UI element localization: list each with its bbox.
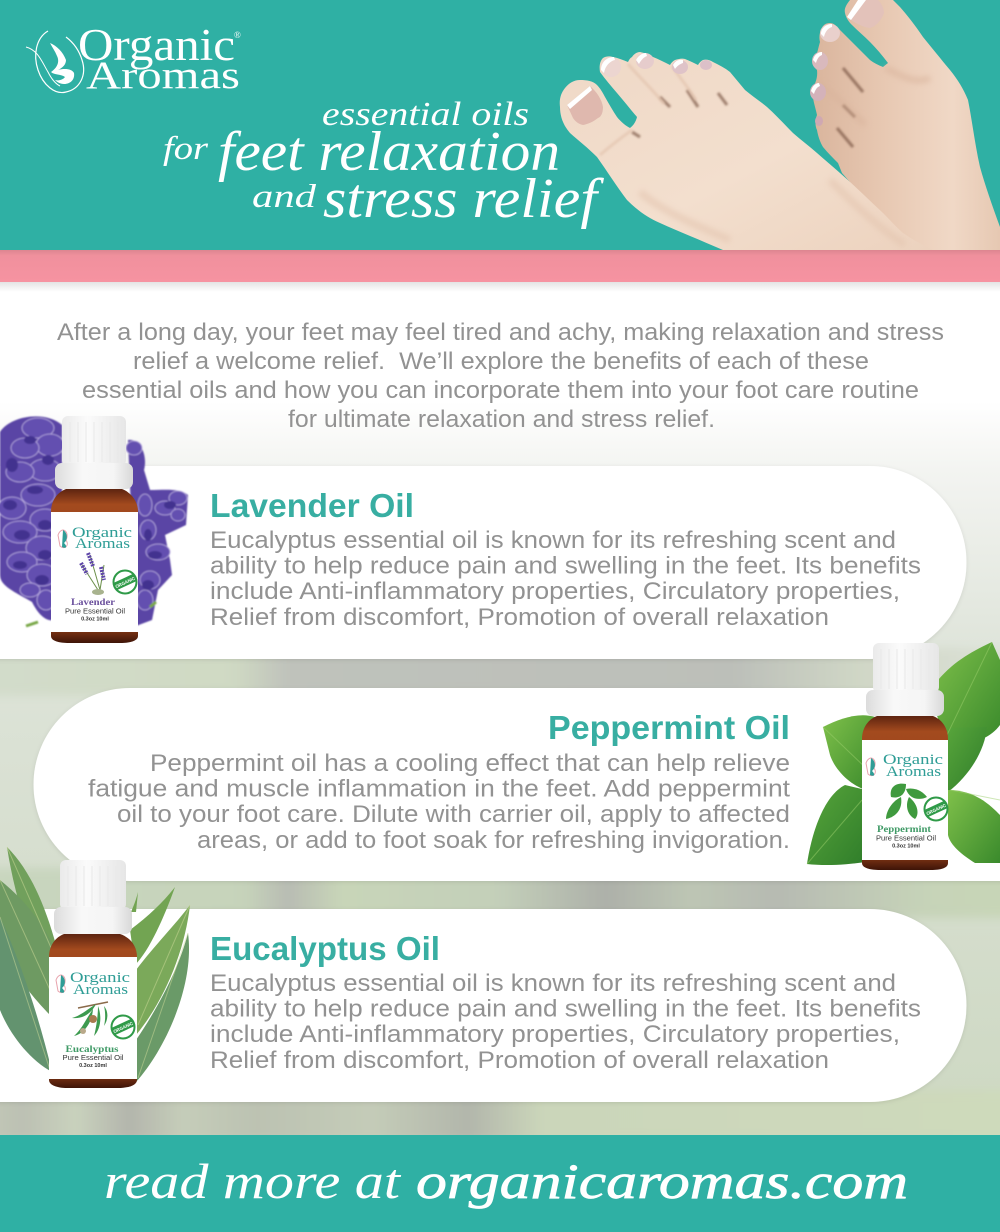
label subtitle: Pure Essential Oil xyxy=(876,836,936,842)
amber glass xyxy=(862,716,948,870)
organic seal xyxy=(111,1016,135,1038)
label logo: Organic xyxy=(72,525,132,541)
front foot xyxy=(560,52,933,250)
toenails xyxy=(567,0,884,126)
heading: Lavender Oil xyxy=(210,487,414,524)
description: include Anti-inflammatory properties, Circulatory properties, xyxy=(210,578,900,605)
intro paragraph: for ultimate relaxation and stress relief. xyxy=(288,406,715,433)
product: eucalyptus bottle xyxy=(49,860,137,1088)
logo wordmark line 1: Organic xyxy=(78,20,235,70)
description: Relief from discomfort, Promotion of overall relaxation xyxy=(210,1047,829,1074)
label herb: mint xyxy=(886,784,927,819)
rear foot xyxy=(811,0,1000,250)
amber glass xyxy=(49,934,137,1088)
label size: 0.3oz 10ml xyxy=(892,844,920,850)
description xyxy=(210,527,921,631)
white label xyxy=(49,957,137,1079)
heading: Eucalyptus Oil xyxy=(210,930,440,967)
description: ability to help reduce pain and swelling in the feet. Its benefits xyxy=(210,552,921,580)
logo wordmark line 2: Aromas xyxy=(86,54,240,97)
title: for xyxy=(163,131,208,167)
description: include Anti-inflammatory properties, Circulatory properties, xyxy=(210,1021,900,1048)
intro paragraph: After a long day, your feet may feel tired and achy, making relaxation and stress xyxy=(57,319,944,346)
intro paragraph: essential oils and how you can incorporate them into your foot care routine xyxy=(82,377,919,404)
registered mark: ® xyxy=(234,30,241,40)
title xyxy=(163,96,605,230)
label logo: Aromas xyxy=(75,536,130,552)
white label xyxy=(862,740,948,860)
footer call to action xyxy=(104,1153,908,1209)
label subtitle: Pure Essential Oil xyxy=(62,1055,124,1062)
product: lavender bottle xyxy=(51,416,138,643)
description: areas, or add to foot soak for refreshing invigoration. xyxy=(197,827,790,854)
description: oil to your foot care. Dilute with carrier oil, apply to affected xyxy=(117,801,790,828)
eucalyptus text xyxy=(210,930,921,1074)
description xyxy=(210,970,921,1074)
pink band xyxy=(0,250,1000,282)
label product name: Eucalyptus xyxy=(66,1044,119,1054)
label size: 0.3oz 10ml xyxy=(79,1063,107,1069)
panel: eucalyptus oil card xyxy=(0,909,966,1102)
organic seal xyxy=(924,798,948,820)
logo: Organic Aromas xyxy=(26,20,241,97)
description: Eucalyptus essential oil is known for its refreshing scent and xyxy=(210,970,896,997)
label subtitle: Pure Essential Oil xyxy=(65,608,125,616)
footer call to action: organicaromas.com xyxy=(416,1153,908,1209)
label logo: Organic xyxy=(883,752,943,768)
organic seal: ORGANIC xyxy=(115,575,137,589)
description: fatigue and muscle inflammation in the feet. Add peppermint xyxy=(88,776,790,802)
panel: lavender oil card xyxy=(0,466,966,659)
heading: Peppermint Oil xyxy=(548,709,790,746)
white label xyxy=(51,512,138,632)
footer band xyxy=(0,1135,1000,1232)
bottle collar xyxy=(866,690,944,716)
footer call to action: read more at xyxy=(104,1153,401,1209)
lavender text xyxy=(210,487,921,631)
label product name: Lavender xyxy=(71,597,115,607)
background: fading blurred herb field xyxy=(0,282,1000,1142)
bottle cap xyxy=(60,860,126,910)
product: peppermint bottle xyxy=(862,643,948,870)
label herb: eucalyptus xyxy=(72,1002,108,1036)
description: Peppermint oil has a cooling effect that can help relieve xyxy=(150,750,790,777)
label logo: Organic xyxy=(70,970,130,986)
icon: butterfly xyxy=(26,31,84,93)
illustration: lavender sprigs xyxy=(0,416,188,626)
intro paragraph xyxy=(57,319,944,433)
intro paragraph: relief a welcome relief. We’ll explore the benefits of each of these xyxy=(133,348,869,375)
bottle cap xyxy=(62,416,126,466)
label product name: Peppermint xyxy=(877,824,931,834)
organic seal: ORGANIC xyxy=(113,1020,135,1034)
amber glass xyxy=(51,489,138,643)
description xyxy=(88,750,790,854)
title: feet relaxation xyxy=(218,121,560,183)
label logo: Aromas xyxy=(73,982,128,998)
peppermint text xyxy=(88,709,790,854)
label herb: lavender xyxy=(81,553,104,595)
illustration: mint leaves xyxy=(807,642,1000,865)
description: ability to help reduce pain and swelling in the feet. Its benefits xyxy=(210,996,921,1022)
band shadow xyxy=(0,282,1000,292)
label logo xyxy=(56,970,130,998)
organic seal: ORGANIC xyxy=(926,802,948,816)
illustration: eucalyptus leaves xyxy=(0,847,190,1082)
title: essential oils xyxy=(322,96,529,133)
bottle collar xyxy=(55,463,133,489)
bottle cap xyxy=(873,643,939,693)
label logo: Aromas xyxy=(886,764,941,780)
label size: 0.3oz 10ml xyxy=(81,616,109,622)
panel: peppermint oil card xyxy=(33,688,1000,881)
title: stress relief xyxy=(323,168,605,230)
bottle collar xyxy=(54,907,132,934)
image: relaxed feet xyxy=(560,0,1000,250)
label logo xyxy=(58,525,132,552)
description: Relief from discomfort, Promotion of overall relaxation xyxy=(210,604,829,631)
organic seal xyxy=(113,570,137,594)
label logo xyxy=(866,752,943,780)
title: and xyxy=(252,179,317,215)
header band xyxy=(0,0,1000,250)
description: Eucalyptus essential oil is known for its refreshing scent and xyxy=(210,527,896,554)
